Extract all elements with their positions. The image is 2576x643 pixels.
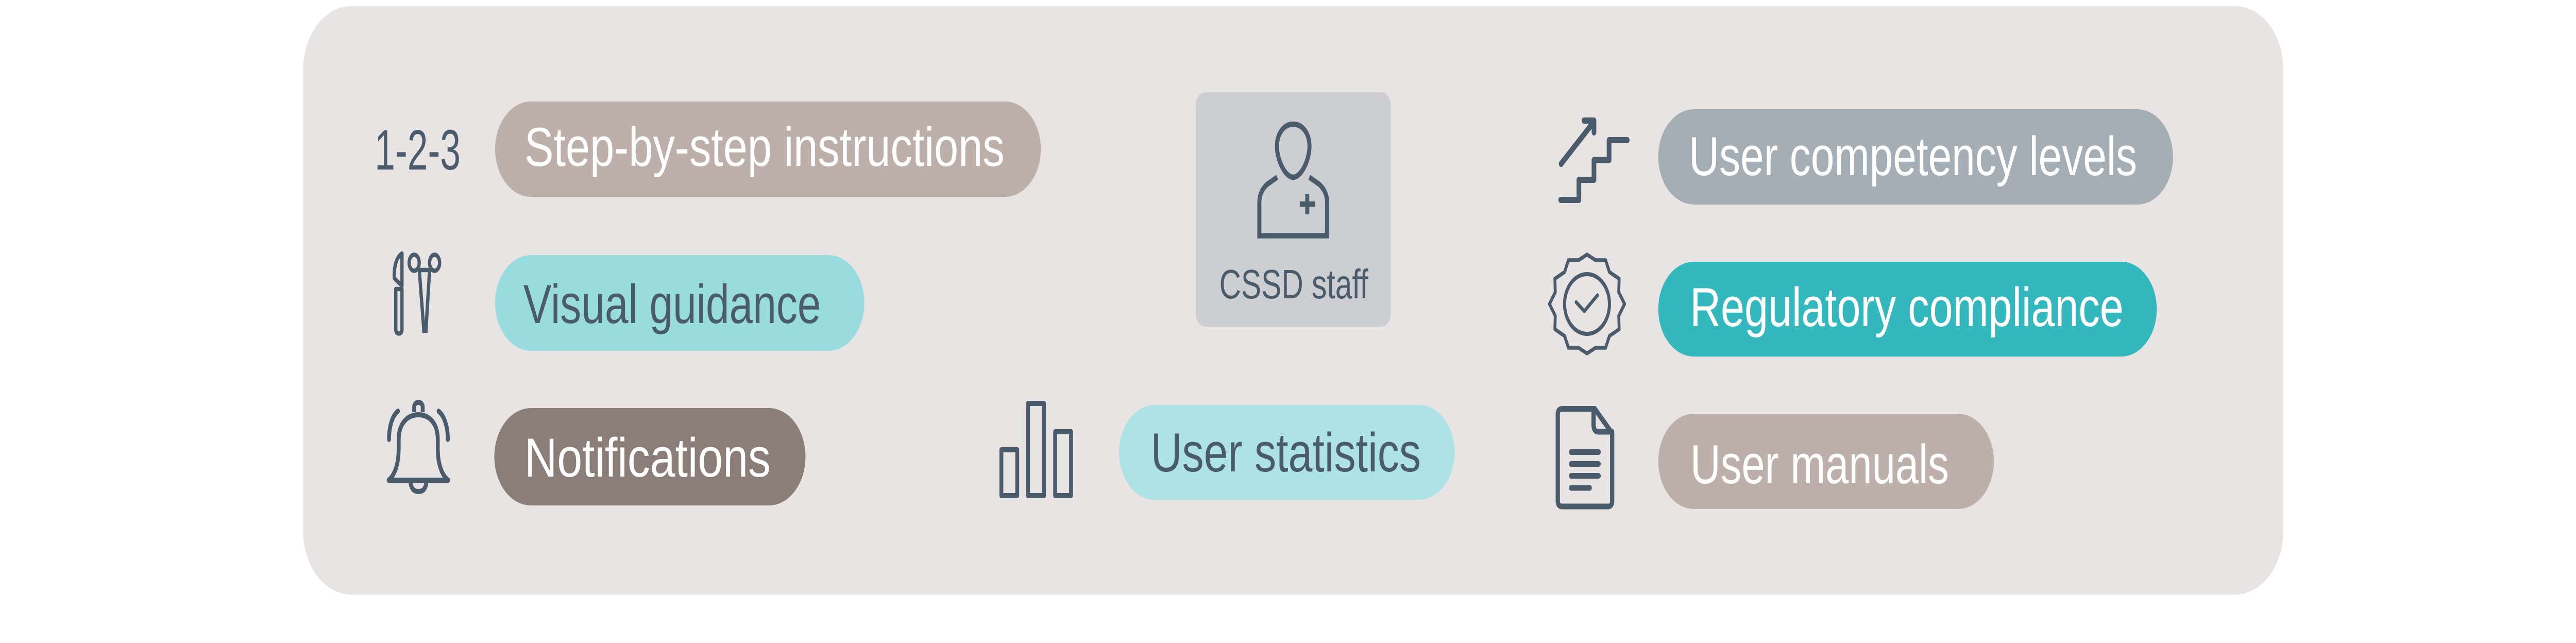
card: CSSD staff [1196, 92, 1391, 327]
pill: User competency levels [1658, 109, 2173, 205]
icon: scalpel and scissors [394, 253, 439, 334]
pill: User competency levels: User competency levels [1689, 126, 2137, 188]
pill: Notifications [494, 408, 805, 505]
pill: Visual guidance: Visual guidance [523, 274, 821, 335]
icon: notification bell [388, 402, 448, 492]
pill: Regulatory compliance: Regulatory compliance [1690, 277, 2124, 339]
pill: User statistics: User statistics [1151, 422, 1421, 484]
pill: User manuals: User manuals [1690, 434, 1949, 496]
panel: CSSD staff features [303, 6, 2283, 595]
icon: 1-2-3: 1-2-3 [375, 119, 461, 182]
pill: Visual guidance [495, 255, 865, 351]
icon: compliance badge with check [1550, 255, 1624, 353]
icon: bar chart statistics [1002, 403, 1071, 496]
icon: medical staff person [1259, 124, 1327, 236]
pill: User manuals [1658, 414, 1994, 509]
pill: Step-by-step instructions: Step-by-step instructions [524, 116, 1005, 178]
pill: User statistics [1119, 405, 1454, 500]
pill: Notifications: Notifications [524, 427, 771, 489]
icon: document manual [1558, 409, 1612, 506]
pill: Regulatory compliance [1658, 262, 2157, 357]
icon: stairs with rising arrow [1561, 121, 1628, 200]
pill: Step-by-step instructions [495, 101, 1041, 197]
label: CSSD staff: CSSD staff [1219, 261, 1368, 307]
